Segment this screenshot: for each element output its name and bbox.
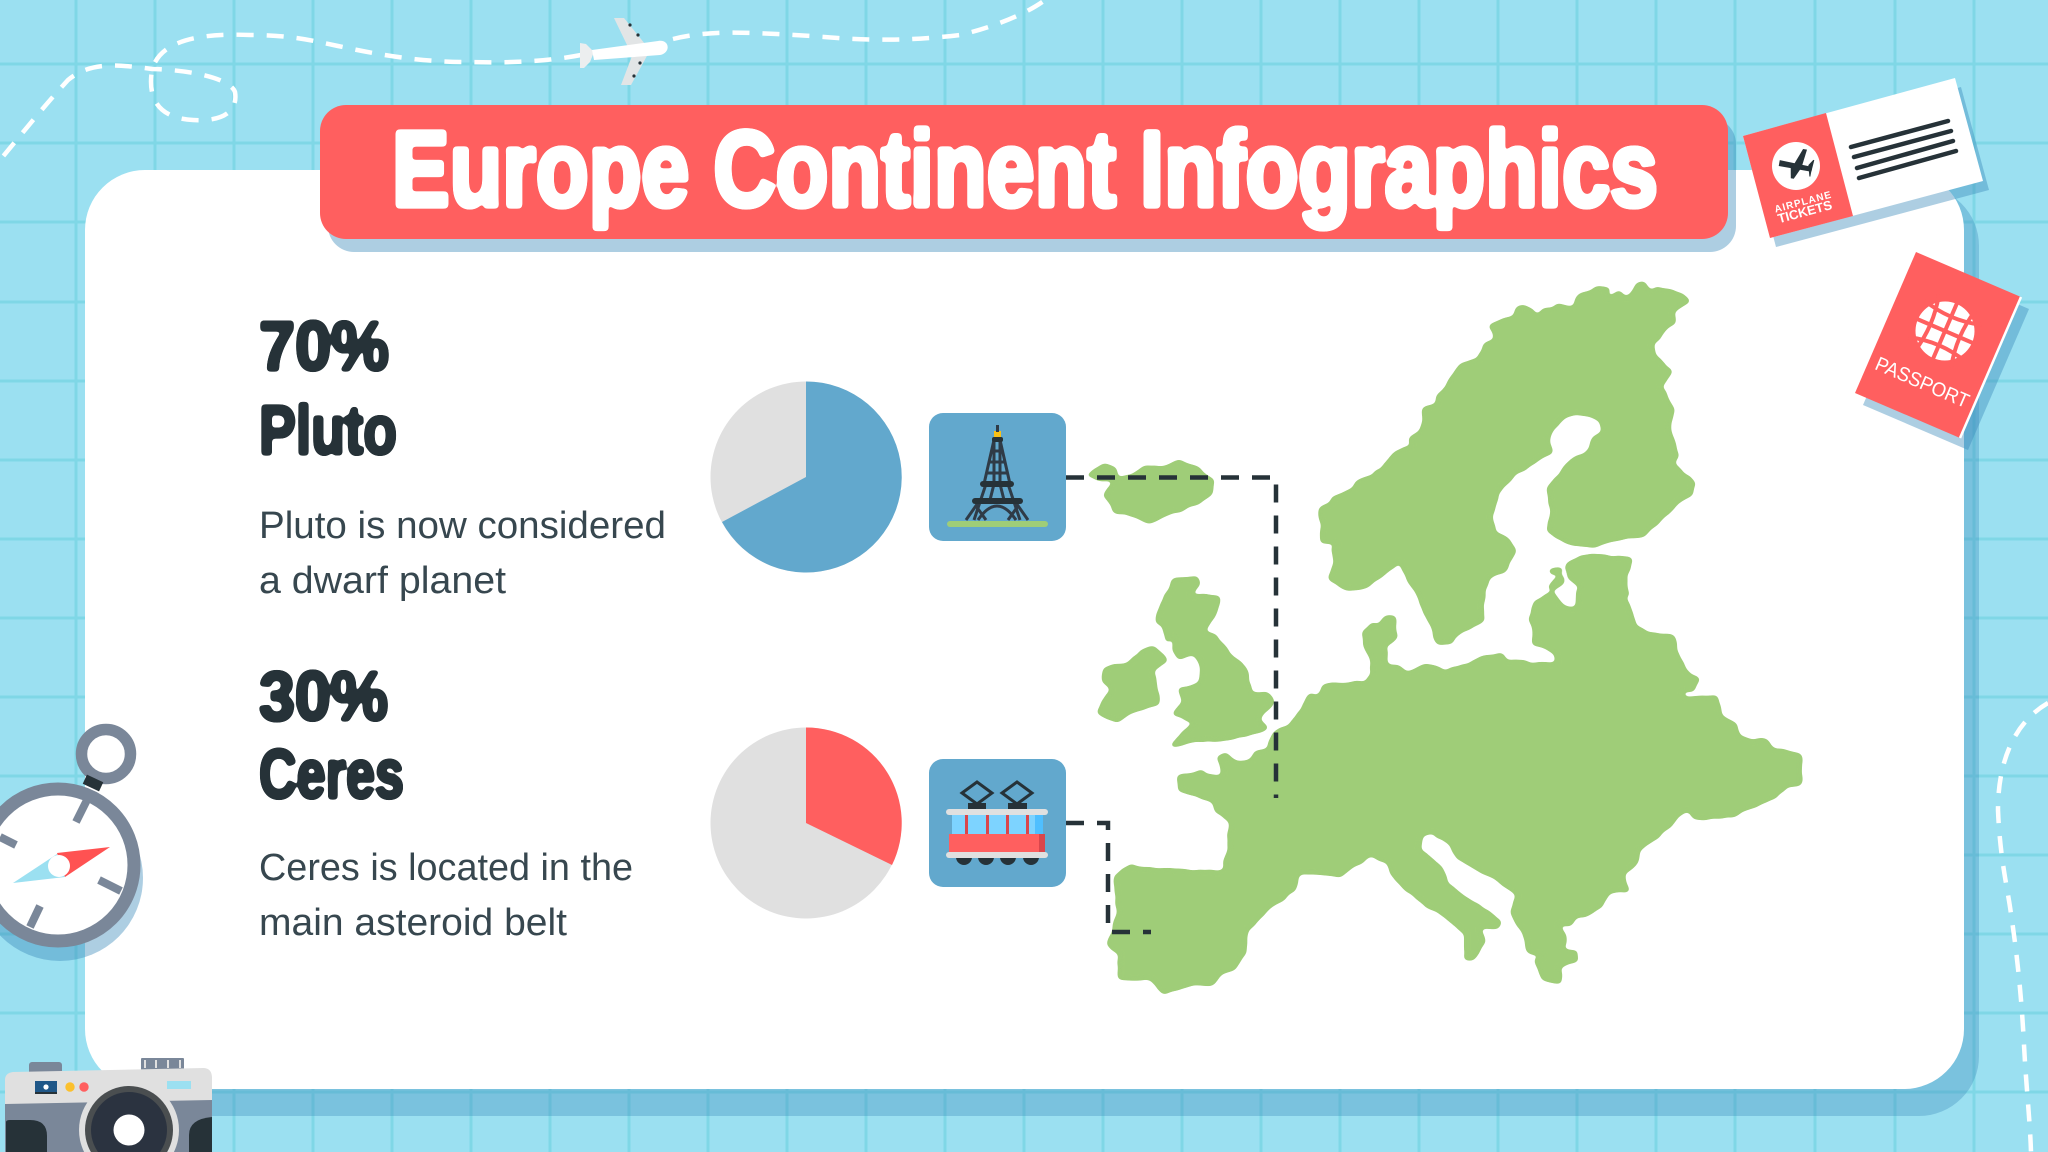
connector: Spain [1066, 823, 1151, 932]
pie chart: 30% Ceres [710, 727, 902, 918]
icon: airplane ticket: TICKETS [1776, 197, 1834, 226]
pie chart: 70% Pluto [710, 381, 902, 572]
icon: Eiffel Tower tile [929, 413, 1066, 541]
icon: passport: PASSPORT [1872, 353, 1972, 413]
icon: compass [0, 730, 143, 961]
icon: airplane [580, 18, 668, 85]
title banner [320, 105, 1736, 252]
text block: Pluto: Pluto is now considered [259, 505, 666, 547]
text block: Pluto: Pluto [259, 391, 397, 469]
icon: airplane ticket [1743, 78, 1989, 247]
text block: Ceres: Ceres is located in the [259, 847, 633, 889]
icon: tram tile [929, 759, 1066, 887]
Scandinavia and Finland [1321, 282, 1694, 643]
Iceland [1088, 461, 1212, 521]
dashed flight path: top [0, 0, 1045, 160]
text block: Ceres: 30% [259, 657, 388, 735]
icon: passport [1855, 252, 2029, 450]
text block: Ceres: Ceres [259, 735, 404, 813]
dashed flight path: right [1998, 703, 2048, 1152]
panel: white card [85, 170, 1979, 1116]
Ireland [1099, 647, 1166, 721]
Great Britain [1157, 578, 1273, 745]
icon: camera [5, 1058, 212, 1152]
title: Europe Continent Infographics [392, 108, 1658, 229]
icon: airplane ticket: AIRPLANE [1773, 190, 1833, 216]
Baltic islands [1549, 569, 1563, 589]
connector: Iceland [1066, 478, 1276, 798]
map of Europe [1088, 282, 1803, 994]
text block: Ceres [259, 657, 633, 944]
text block: Pluto [259, 307, 666, 602]
text block: Ceres: main asteroid belt [259, 902, 567, 944]
text block: Pluto: 70% [259, 307, 389, 385]
mainland Europe [1109, 556, 1800, 993]
text block: Pluto: a dwarf planet [259, 560, 506, 602]
